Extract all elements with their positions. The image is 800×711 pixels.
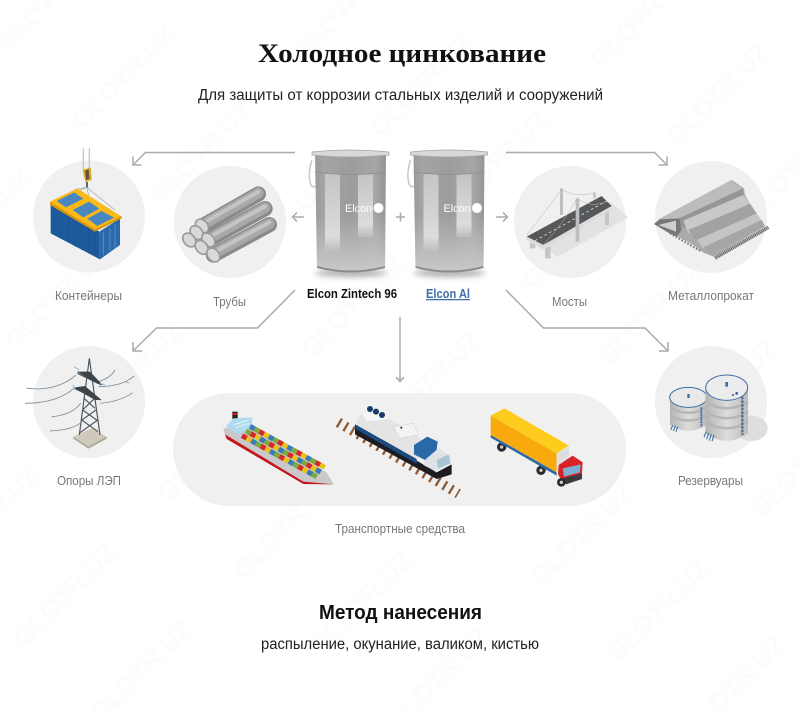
bucket: Elcon Al — [408, 150, 488, 277]
watermark — [39, 150, 748, 479]
product link: Elcon Al: Elcon Al — [426, 287, 470, 301]
arrow: to bridges — [496, 212, 508, 222]
watermark: GLOTR.UZ — [524, 477, 639, 592]
watermark: GLOTR.UZ — [227, 469, 342, 584]
arrow: to transport — [396, 317, 404, 382]
watermark: GLOTR.UZ — [660, 36, 775, 151]
arrow: to power towers — [133, 290, 295, 351]
watermark: GLOTR.UZ — [371, 324, 486, 439]
panel: power line towers — [25, 346, 145, 488]
watermark: GLOTR.UZ — [74, 316, 189, 431]
bucket: Elcon Zintech 96 — [309, 150, 389, 277]
arrow: to reservoirs — [506, 290, 668, 351]
icon: power tower — [25, 358, 134, 449]
arrow: to rolled metal — [506, 152, 667, 165]
label: Контейнеры — [55, 289, 122, 303]
watermark: GLOTR.UZ — [439, 104, 554, 219]
watermark: GLOTR.UZ — [142, 95, 257, 210]
watermark: GLOTR.UZ — [668, 332, 783, 447]
icon: bridge — [526, 188, 628, 258]
title: Холодное цинкование — [258, 39, 546, 68]
panel: pipes — [174, 166, 286, 309]
panel: rolled metal — [654, 161, 768, 303]
watermark: GLOTR.UZ — [295, 248, 410, 363]
arrow: to pipes — [292, 212, 304, 222]
watermark: GLOTR.UZ — [363, 27, 478, 142]
panel: bridges — [514, 166, 628, 309]
icon: tanks — [670, 375, 768, 441]
plus sign — [396, 212, 405, 222]
watermark: GLOTR.UZ — [219, 172, 334, 287]
icon: locomotive — [338, 406, 458, 494]
icon: rolled metal — [654, 180, 768, 258]
label: Опоры ЛЭП — [57, 474, 121, 488]
bucket logo: Elcon — [345, 203, 372, 215]
icon: container on hook — [50, 148, 122, 259]
icon: pipes — [180, 192, 269, 265]
label: Трубы — [213, 295, 246, 309]
arrow: to containers — [133, 152, 295, 165]
label: Мосты — [552, 295, 587, 309]
watermark: GLOTR.UZ — [7, 537, 122, 652]
label: Металлопрокат — [668, 289, 754, 303]
icon: truck — [491, 408, 583, 487]
watermark: GLOTR.UZ — [448, 401, 563, 516]
watermark: GLOTR.UZ — [592, 256, 707, 371]
watermark: GLOTR.UZ — [66, 19, 181, 134]
subtitle: Для защиты от коррозии стальных изделий и сооружений — [198, 87, 603, 104]
text: application methods list: распыление, окунание, валиком, кистью — [261, 636, 539, 653]
product name: Elcon Zintech 96: Elcon Zintech 96 — [307, 287, 397, 301]
bucket logo: Elcon — [444, 203, 470, 215]
watermark: GLOTR.UZ — [303, 545, 418, 660]
label: Резервуары — [678, 474, 743, 488]
panel: reservoirs — [655, 346, 768, 488]
watermark: GLOTR.UZ — [0, 240, 113, 355]
heading: application method: Метод нанесения — [319, 602, 482, 624]
panel: transport — [173, 393, 626, 536]
label: Транспортные средства — [335, 522, 465, 536]
icon: container ship — [223, 412, 334, 484]
panel: containers — [33, 148, 145, 303]
watermark: GLOTR.UZ — [151, 392, 266, 507]
watermark: GLOTR.UZ — [600, 553, 715, 668]
watermark: GLOTR.UZ — [515, 180, 630, 295]
